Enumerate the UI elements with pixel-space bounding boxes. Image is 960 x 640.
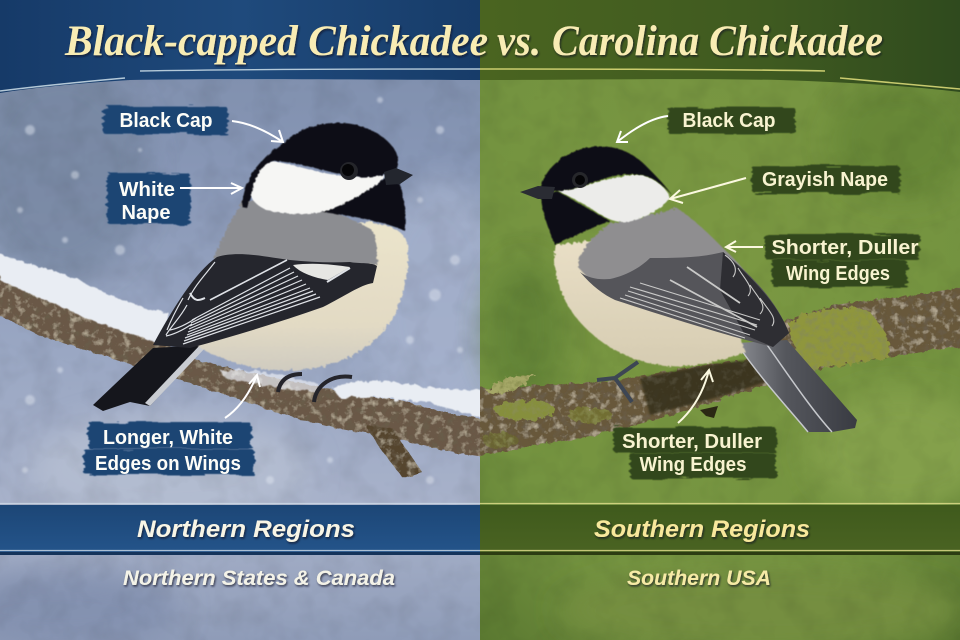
dark wing tip bbox=[720, 252, 789, 347]
bird: black-capped chickadee bbox=[93, 123, 413, 411]
beak bbox=[384, 168, 413, 185]
wing feather edges bbox=[620, 255, 774, 338]
black bib bbox=[322, 178, 406, 231]
feet bbox=[597, 362, 638, 402]
arrow bbox=[670, 178, 746, 203]
callout: black cap north bbox=[103, 107, 283, 142]
tail bbox=[737, 340, 857, 432]
arrow bbox=[726, 241, 763, 252]
gray back bbox=[213, 200, 377, 270]
callout: white nape north: Nape bbox=[122, 202, 170, 224]
callout: black cap south bbox=[617, 107, 795, 142]
title: Black-capped Chickadee bbox=[64, 18, 488, 65]
callout: grayish nape south bbox=[670, 166, 900, 203]
callout: wing edges right south: Shorter, Duller bbox=[772, 237, 919, 259]
header rule: right bbox=[480, 69, 960, 89]
tail bbox=[93, 345, 207, 411]
callout: black cap south: Black Cap bbox=[682, 110, 776, 132]
callout: wing edges bottom south bbox=[614, 370, 776, 479]
title: vs. bbox=[497, 18, 541, 65]
branch shadow bbox=[640, 360, 770, 415]
black bib bbox=[541, 191, 610, 245]
white cheek and neck bbox=[557, 175, 670, 222]
callout: wing edges right south bbox=[726, 234, 920, 287]
white cheek and neck bbox=[250, 161, 385, 214]
branch: northern with snow bbox=[0, 252, 490, 478]
callout: grayish nape south: Grayish Nape bbox=[762, 169, 888, 191]
range label: northern: Northern States & Canada bbox=[123, 567, 395, 590]
callout: white nape north: White bbox=[119, 179, 175, 201]
callout: wing edges north bbox=[84, 375, 260, 475]
arrow bbox=[617, 116, 668, 142]
callout: wing edges bottom south: Shorter, Duller bbox=[622, 431, 762, 453]
arrow bbox=[225, 375, 260, 418]
white wing patch bbox=[293, 264, 350, 280]
black cap bbox=[541, 146, 672, 195]
wing feather edges bbox=[166, 260, 350, 344]
bird: carolina chickadee bbox=[520, 146, 857, 432]
callout: wing edges bottom south: Wing Edges bbox=[640, 454, 746, 476]
black cap bbox=[242, 123, 398, 208]
wing bbox=[580, 252, 789, 347]
moss patches bbox=[482, 307, 889, 448]
panel: southern background bbox=[480, 0, 960, 640]
callout: wing edges north: Edges on Wings bbox=[95, 453, 241, 475]
arrow bbox=[180, 183, 242, 194]
callout: black cap north: Black Cap bbox=[120, 110, 212, 132]
callout: wing edges right south: Wing Edges bbox=[786, 263, 890, 285]
callout: wing edges north: Longer, White bbox=[103, 427, 233, 449]
feet bbox=[278, 374, 352, 402]
region band: northern: Northern Regions bbox=[137, 516, 355, 543]
eye bbox=[572, 172, 588, 188]
region band: northern bbox=[0, 504, 480, 555]
wing bbox=[153, 254, 377, 348]
belly bbox=[554, 240, 745, 366]
eye bbox=[340, 162, 358, 180]
beak bbox=[520, 186, 555, 199]
arrow bbox=[232, 121, 283, 142]
gray back bbox=[577, 208, 772, 315]
arrow bbox=[678, 370, 713, 423]
region band: southern: Southern Regions bbox=[594, 516, 810, 543]
title bbox=[64, 18, 883, 65]
header band: northern bbox=[0, 0, 480, 93]
belly bbox=[190, 222, 408, 370]
panel: northern background bbox=[0, 0, 510, 640]
header rule: left bbox=[0, 69, 480, 91]
title: Carolina Chickadee bbox=[552, 18, 883, 65]
region band: southern bbox=[480, 504, 960, 555]
header band: southern bbox=[480, 0, 960, 92]
range label: southern: Southern USA bbox=[627, 567, 771, 590]
callout: white nape north bbox=[107, 173, 242, 224]
branch: southern with moss bbox=[470, 286, 960, 458]
snow on branch bbox=[0, 252, 485, 418]
